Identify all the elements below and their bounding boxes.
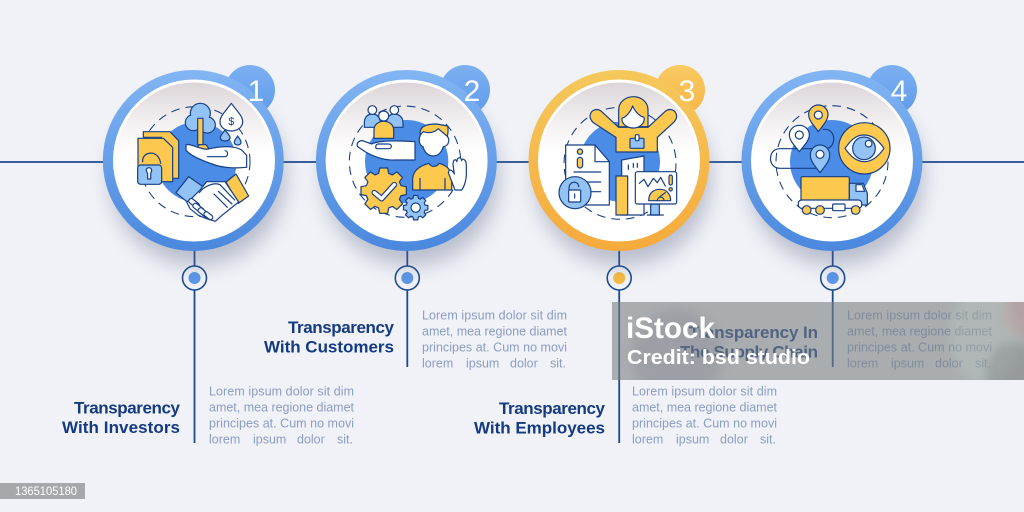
step 4 connector and node xyxy=(821,250,845,367)
text block: supply chain: lorem xyxy=(847,356,878,370)
step 3 connector and node xyxy=(607,250,631,443)
watermark logo: iStock xyxy=(626,312,715,345)
panel: step 4 supply chain xyxy=(742,65,924,367)
heading: investors: Transparency xyxy=(74,398,181,418)
icon: employees xyxy=(559,97,677,219)
heading: employees: With Employees xyxy=(474,418,605,438)
text block: customers: amet, mea regione diamet xyxy=(422,324,568,338)
watermark banner xyxy=(612,302,1024,380)
horizontal timeline xyxy=(0,161,1024,163)
step 4 number: 4 xyxy=(891,75,907,108)
watermark credit: Credit: bsd studio xyxy=(627,347,810,369)
icon: supply chain xyxy=(770,105,890,218)
text block: employees: ipsum xyxy=(676,432,709,446)
text block: customers: Lorem ipsum dolor sit dim xyxy=(422,308,567,322)
step 2 disc xyxy=(316,65,499,266)
icon: customers xyxy=(349,106,466,220)
heading: employees: Transparency xyxy=(499,399,606,418)
text block: supply chain: amet, mea regione diamet xyxy=(847,324,993,338)
text block: investors: principes at. Cum no movi xyxy=(209,416,354,430)
icon: investors: $ xyxy=(228,116,234,128)
panel: step 3 employees xyxy=(528,65,711,443)
text block: supply chain: dolor xyxy=(935,356,963,370)
step 3 number: 3 xyxy=(679,75,695,108)
text block: supply chain: principes at. Cum no movi xyxy=(847,340,992,354)
step 3 disc xyxy=(528,65,711,266)
text block: investors: sit. xyxy=(337,432,353,446)
heading: supply chain: Transparency In xyxy=(689,323,818,342)
heading: customers: With Customers xyxy=(264,338,394,356)
step 1 number: 1 xyxy=(248,75,264,108)
text block: employees: sit. xyxy=(760,432,776,446)
text block: supply chain: ipsum xyxy=(891,356,924,370)
step 1 connector and node xyxy=(182,250,206,443)
text block: employees: dolor xyxy=(720,432,748,446)
text block: customers: ipsum xyxy=(466,356,499,370)
text block: investors: ipsum xyxy=(253,432,286,446)
text block: supply chain: Lorem ipsum dolor sit dim xyxy=(847,308,992,322)
text block: supply chain: sit. xyxy=(975,356,991,370)
text block: investors: Lorem ipsum dolor sit dim xyxy=(209,384,354,398)
panel: step 1 investors xyxy=(103,65,286,443)
step 2 connector and node xyxy=(395,250,419,367)
text block: customers: lorem xyxy=(422,356,453,370)
step 4 disc xyxy=(742,65,924,266)
panel: step 2 customers xyxy=(316,65,499,367)
text block: investors: lorem xyxy=(209,432,240,446)
step 1 disc xyxy=(103,65,286,266)
icon: investors xyxy=(138,103,250,221)
text block: investors: dolor xyxy=(297,432,325,446)
step 2 number: 2 xyxy=(464,75,480,108)
heading: supply chain: The Supply Chain xyxy=(680,342,818,362)
image id tag: 1365105180 xyxy=(15,486,77,498)
text block: employees: Lorem ipsum dolor sit dim xyxy=(632,384,777,398)
heading: customers: Transparency xyxy=(288,318,395,337)
image id tag xyxy=(0,483,85,499)
text block: employees: lorem xyxy=(632,432,663,446)
text block: investors: amet, mea regione diamet xyxy=(209,400,355,414)
text block: employees: amet, mea regione diamet xyxy=(632,400,778,414)
heading: investors: With Investors xyxy=(62,418,180,437)
text block: customers: principes at. Cum no movi xyxy=(422,340,567,354)
text block: customers: sit. xyxy=(550,356,566,370)
text block: employees: principes at. Cum no movi xyxy=(632,416,777,430)
text block: customers: dolor xyxy=(510,356,538,370)
